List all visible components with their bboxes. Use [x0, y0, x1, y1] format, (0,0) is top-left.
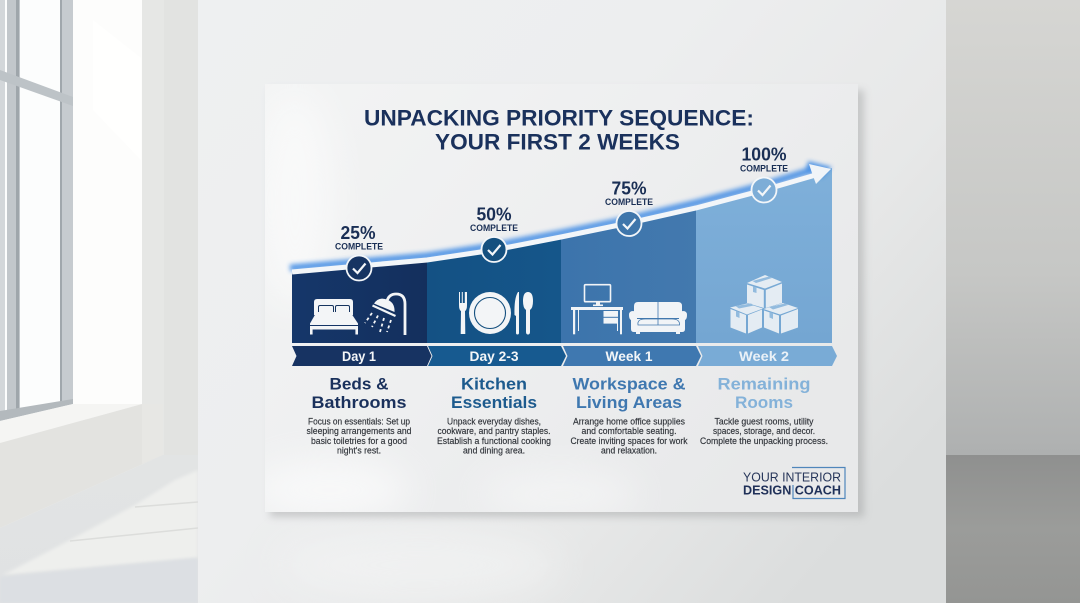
milestone: 25% — [335, 223, 383, 280]
panel shadow — [270, 90, 864, 517]
logo: your interior design coach: YOUR INTERIOR — [743, 470, 841, 484]
chevron: day 2-3: Day 2-3 — [470, 349, 519, 364]
icon: shower — [365, 294, 405, 335]
text block: workspace and living areas: Workspace & — [572, 374, 686, 394]
text block: beds and bathrooms: night's rest. — [337, 446, 381, 456]
text block: beds and bathrooms — [306, 374, 412, 456]
icons: desk and sofa — [571, 285, 687, 334]
background: centre wall — [198, 0, 946, 603]
arrow head glow — [806, 161, 832, 178]
logo: your interior design coach: DESIGN COACH — [743, 484, 841, 498]
curve glow — [290, 170, 812, 268]
text block: workspace and living areas: Arrange home office supplies — [573, 416, 686, 426]
background: right wall and floor — [946, 0, 1080, 603]
milestone: 75% — [605, 178, 653, 236]
text block: kitchen essentials: Essentials — [451, 393, 537, 412]
milestone: 50%: 50% — [476, 204, 512, 224]
milestone: 25%: 25% — [340, 223, 376, 243]
chevron: week 1 — [563, 346, 701, 366]
text block: beds and bathrooms: Bathrooms — [312, 393, 406, 412]
text block: remaining rooms — [700, 374, 828, 446]
text block: kitchen essentials: cookware, and pantry staples. — [438, 426, 550, 436]
text block: remaining rooms: Complete the unpacking process. — [700, 436, 828, 446]
icon: right box — [764, 303, 798, 334]
timeline chevrons — [292, 346, 837, 366]
column: week 1 — [561, 208, 696, 343]
icon: desk with monitor — [571, 285, 623, 334]
chevron: day 1: Day 1 — [342, 349, 376, 364]
icon: spoon — [523, 292, 533, 334]
icons: bed and shower — [310, 294, 405, 335]
text block: workspace and living areas: and relaxation. — [601, 446, 657, 456]
text block: kitchen essentials: Establish a functional cooking — [437, 436, 551, 446]
text block: workspace and living areas — [570, 374, 688, 456]
icon: top box — [747, 275, 782, 308]
icon: bed — [310, 299, 358, 334]
chevron: week 1: Week 1 — [606, 349, 653, 364]
text block: remaining rooms: spaces, storage, and decor. — [713, 426, 815, 436]
column: day 2-3 — [427, 237, 561, 343]
text block: remaining rooms: Rooms — [735, 393, 793, 412]
milestone: 50%: COMPLETE — [470, 223, 518, 233]
text block: workspace and living areas: Living Areas — [576, 393, 682, 412]
milestone: 75%: COMPLETE — [605, 197, 653, 207]
icons: fork, plate, knife, spoon — [459, 292, 533, 334]
text block: kitchen essentials: and dining area. — [463, 446, 525, 456]
column: week 2 — [696, 168, 832, 343]
title — [364, 106, 754, 154]
text block: beds and bathrooms: Beds & — [330, 374, 388, 394]
icon: left box — [730, 304, 763, 334]
text block: beds and bathrooms: sleeping arrangements and — [306, 426, 412, 436]
milestone: 100%: COMPLETE — [740, 164, 788, 174]
text block: beds and bathrooms: basic toiletries for a good — [311, 436, 407, 446]
milestone: 50% — [470, 204, 518, 262]
background: left room with window — [0, 0, 200, 603]
text block: kitchen essentials: Unpack everyday dishes, — [447, 416, 541, 426]
icon: fork — [459, 292, 467, 334]
column: day 1 — [292, 260, 427, 343]
logo: your interior design coach — [743, 468, 845, 498]
milestones — [335, 144, 788, 280]
text block: remaining rooms: Tackle guest rooms, utility — [714, 416, 814, 426]
text block: beds and bathrooms: Focus on essentials: Set up — [308, 416, 410, 426]
title: YOUR FIRST 2 WEEKS — [435, 130, 680, 154]
chevron: day 2-3 — [428, 346, 566, 366]
chevron: day 1 — [292, 346, 432, 366]
chevron: week 2 — [698, 346, 837, 366]
panel: poster board — [250, 84, 858, 520]
text block: workspace and living areas: Create inviting spaces for work — [570, 436, 688, 446]
growth curve arrow — [292, 164, 831, 272]
chevron: week 2: Week 2 — [739, 349, 789, 364]
icon: knife — [514, 292, 519, 334]
text block: workspace and living areas: and comfortable seating. — [582, 426, 676, 436]
milestone: 25%: COMPLETE — [335, 242, 383, 252]
text block: kitchen essentials: Kitchen — [461, 374, 527, 394]
milestone: 100%: 100% — [742, 144, 786, 164]
icons: stacked moving boxes — [730, 275, 798, 334]
text block: kitchen essentials — [437, 374, 551, 456]
milestone: 100% — [740, 144, 788, 202]
chart: progress area columns and growth arrow — [290, 161, 832, 343]
icon: sofa — [629, 302, 687, 334]
icon: plate — [469, 292, 511, 334]
text block: remaining rooms: Remaining — [718, 374, 810, 394]
title: UNPACKING PRIORITY SEQUENCE: — [364, 106, 754, 130]
milestone: 75%: 75% — [612, 178, 646, 198]
